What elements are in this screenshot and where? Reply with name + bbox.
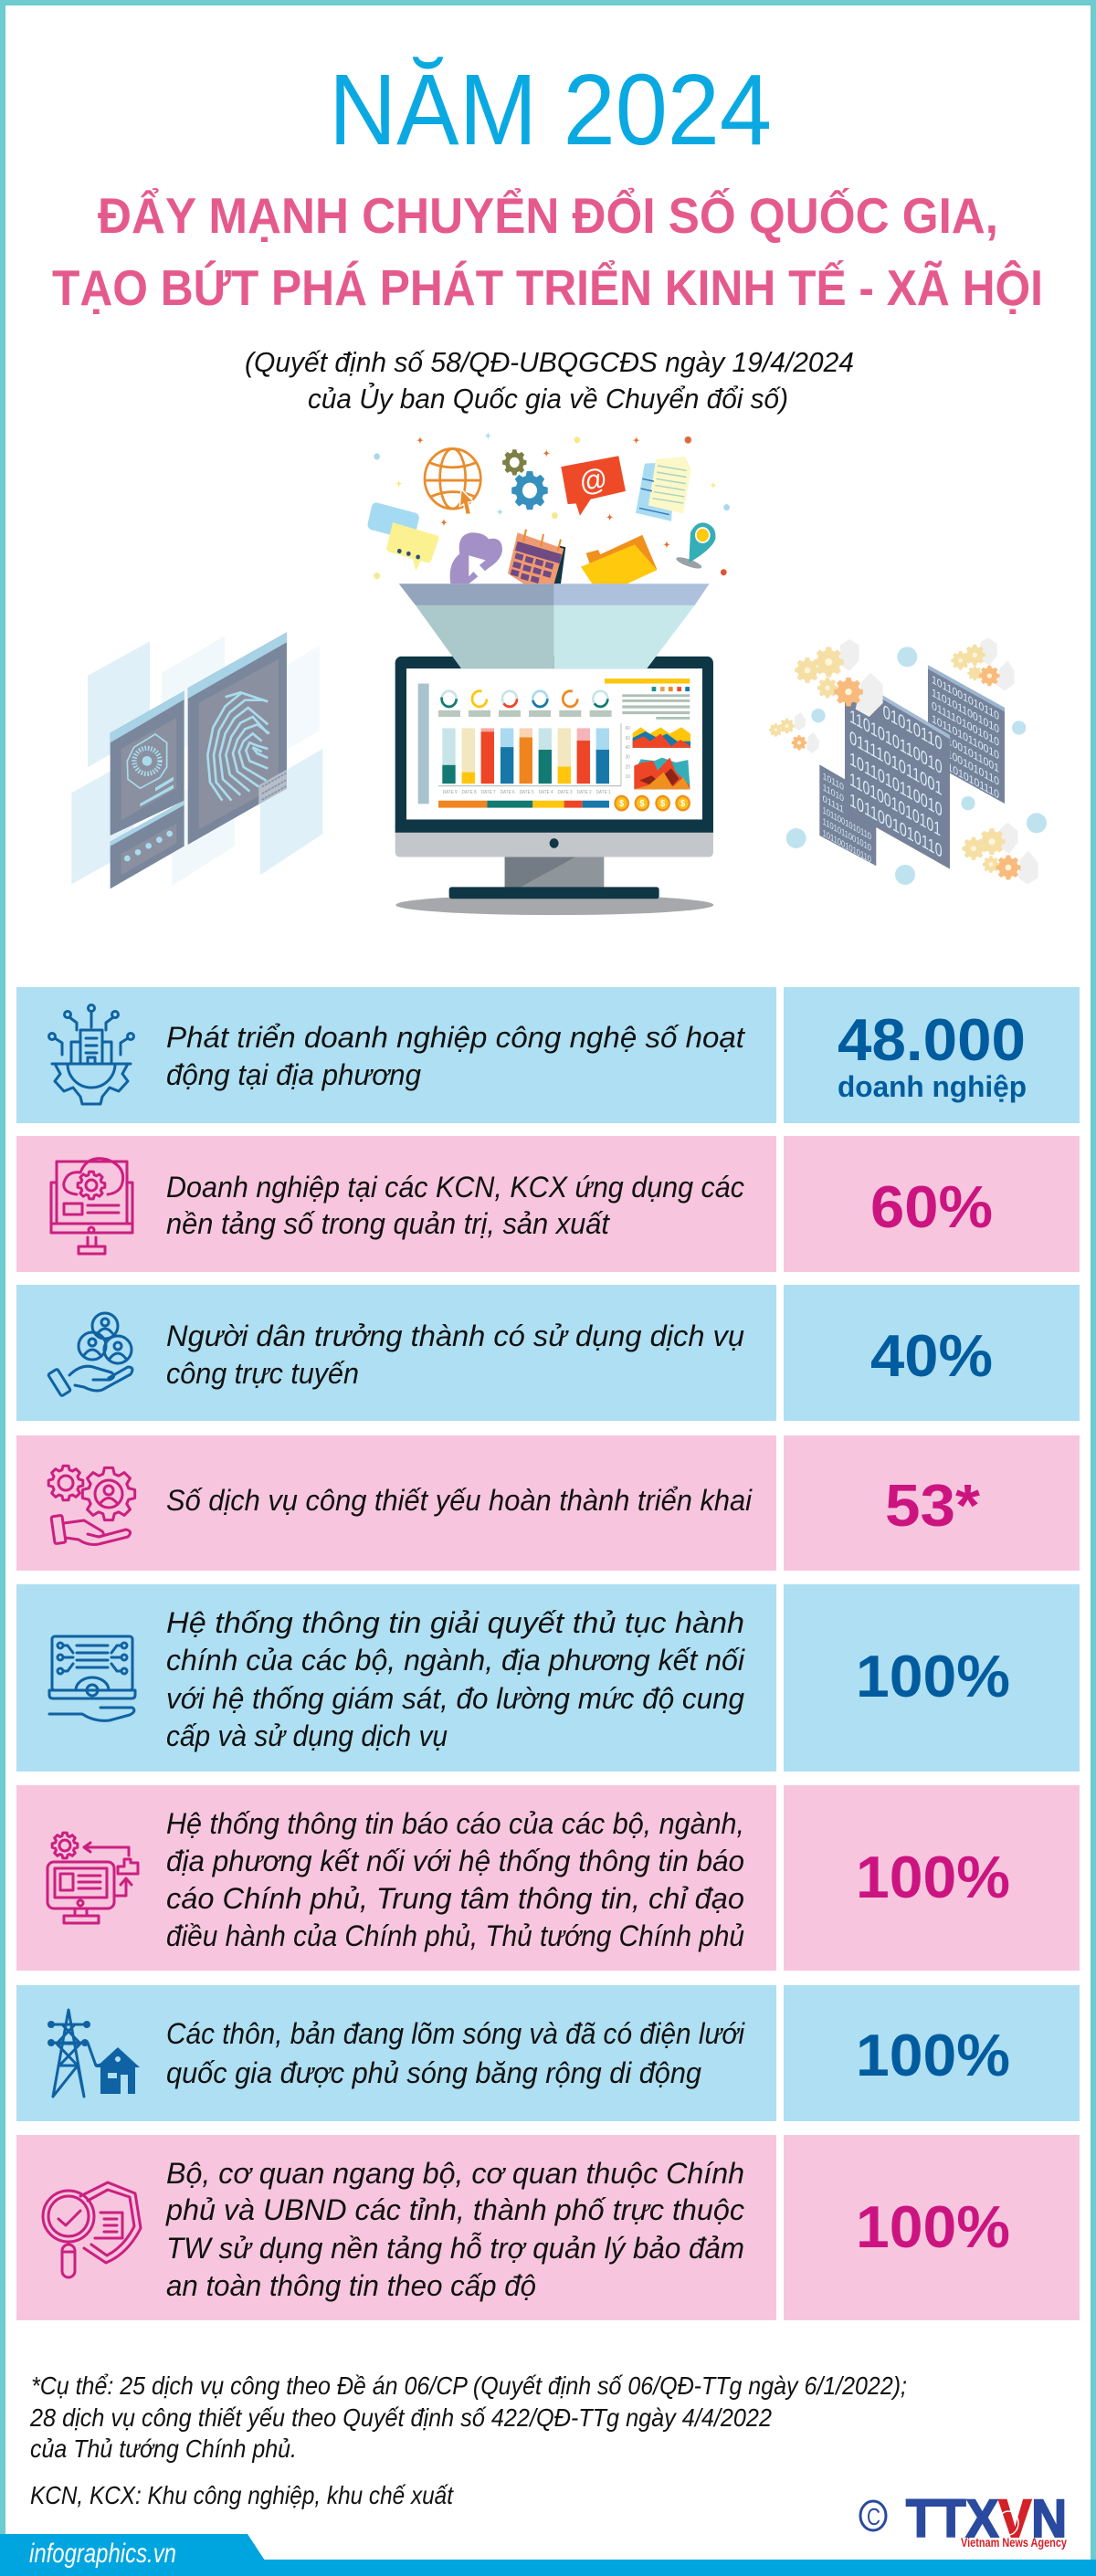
binary text: lower-left panel: 1011001010110 — [823, 805, 871, 843]
binary text: lower-left panel: 1011001010110 — [823, 828, 871, 866]
row text: điều hành của Chính phủ, Thủ tướng Chính phủ — [166, 1919, 744, 1952]
row text: công trực tuyến — [166, 1357, 359, 1390]
footnotes — [29, 2371, 907, 2509]
icon: power tower and house — [47, 2010, 140, 2097]
icon: laptop with circuit on hand — [49, 1636, 135, 1720]
value — [838, 1006, 1027, 1103]
binary text: top-right panel: 1011001010110 — [932, 672, 999, 723]
icon: map pin — [675, 522, 715, 571]
icon: gears and hand — [48, 1466, 135, 1544]
value: 60% — [870, 1173, 993, 1240]
footer bar: infographics.vn — [29, 2539, 176, 2569]
illustration: binary data panels — [769, 637, 1047, 885]
sparkles — [374, 431, 730, 579]
dashboard area charts: 60 — [626, 726, 630, 731]
icon: hand holding people — [47, 1313, 132, 1396]
binary text: top-right panel: 1101011001010 — [932, 685, 999, 736]
binary text: top-right panel — [932, 672, 999, 802]
row text: Bộ, cơ quan ngang bộ, cơ quan thuộc Chính — [166, 2157, 744, 2190]
value: 100% — [856, 1643, 1010, 1709]
dashboard bar chart: DATE 6 — [501, 790, 515, 795]
icon: smart city on gear — [49, 1004, 133, 1104]
dashboard stacked bar — [438, 801, 609, 808]
panel: row 4 public services — [16, 1435, 1080, 1571]
row text: quốc gia được phủ sóng băng rộng di động — [166, 2056, 701, 2089]
binary text: main panel — [849, 699, 943, 862]
row text: Hệ thống thông tin báo cáo của các bộ, ngành, — [166, 1807, 744, 1840]
binary text: main panel: 1011010110010 — [849, 747, 943, 821]
row text: với hệ thống giám sát, đo lường mức độ cung — [166, 1682, 744, 1715]
icon: gears — [502, 449, 548, 510]
row text — [166, 1807, 744, 1952]
footnotes: KCN, KCX: Khu công nghiệp, khu chế xuất — [30, 2481, 454, 2509]
gears cluster 2 — [951, 637, 1015, 691]
row text: Doanh nghiệp tại các KCN, KCX ứng dụng các — [166, 1171, 744, 1204]
value: 40% — [870, 1322, 993, 1389]
source note — [245, 346, 854, 415]
icon: chat bubbles — [366, 501, 439, 571]
dashboard area charts — [621, 723, 690, 789]
value: doanh nghiệp — [838, 1070, 1027, 1103]
panel: row 6 reporting systems — [16, 1785, 1080, 1971]
dashboard area charts: 40 — [626, 745, 630, 751]
binary text: lower-left panel: 01111 — [823, 794, 844, 815]
row text: TW sử dụng nền tảng hỗ trợ quản lý bảo đảm — [166, 2232, 744, 2265]
binary text: lower-left panel — [823, 771, 871, 866]
dashboard bar chart: DATE 9 — [443, 790, 458, 795]
monitor — [395, 657, 713, 915]
binary text: top-right panel: 1001010101110 — [932, 751, 999, 802]
footnotes: 28 dịch vụ công thiết yếu theo Quyết định số 422/QĐ-TTg ngày 4/4/2022 — [29, 2403, 772, 2432]
panel: row 5 admin procedures — [16, 1584, 1080, 1772]
row text: nền tảng số trong quản trị, sản xuất — [166, 1207, 610, 1240]
icon: monitor reporting — [47, 1833, 138, 1923]
binary text: main panel: 1101001010101 — [849, 767, 941, 841]
dashboard area charts: 30 — [626, 755, 630, 761]
binary text: top-right panel: 1101001011001 — [932, 724, 999, 775]
dashboard bar chart: DATE 8 — [462, 790, 477, 795]
dashboard bar chart: DATE 3 — [558, 790, 573, 795]
row text: an toàn thông tin theo cấp độ — [166, 2269, 536, 2302]
value: 100% — [856, 2022, 1010, 2088]
panel: row 3 citizens online — [16, 1285, 1080, 1421]
logo: TTXVN: Vietnam News Agency — [961, 2535, 1067, 2550]
dashboard legend — [605, 678, 690, 720]
icon: cloud upload — [450, 532, 502, 584]
binary text: main panel: 01010110 — [883, 699, 943, 755]
row text — [166, 1320, 744, 1390]
dashboard bar chart: DATE 7 — [481, 790, 496, 795]
row text: Người dân trưởng thành có sử dụng dịch vụ — [166, 1320, 744, 1352]
row text: Số dịch vụ công thiết yếu hoàn thành triển khai — [166, 1484, 753, 1517]
row text — [166, 1021, 745, 1091]
dashboard coins: $ — [660, 799, 666, 809]
panel: row 2 industrial zones — [16, 1136, 1080, 1272]
gears cluster 1 — [795, 639, 883, 717]
dashboard sidebar — [418, 684, 429, 804]
panel: row 8 information security — [16, 2135, 1080, 2320]
dashboard donuts — [442, 691, 607, 707]
binary text: top-right panel: 1011010110010 — [932, 711, 999, 762]
panel: row 1 digital tech enterprises — [16, 987, 1080, 1123]
binary text: top-right panel: 1011001010110 — [932, 738, 999, 788]
row text: chính của các bộ, ngành, địa phương kết nối — [166, 1644, 745, 1677]
dashboard bar chart: DATE 2 — [577, 790, 592, 795]
funnel — [399, 584, 710, 668]
row text: động tại địa phương — [166, 1058, 421, 1091]
row text: Các thôn, bản đang lõm sóng và đã có điện lưới — [166, 2017, 745, 2050]
binary text: top-right panel: 0111101001010 — [932, 699, 999, 749]
logo: TTXVN: C — [867, 2503, 880, 2530]
icon: folder — [581, 535, 657, 584]
dashboard area charts: 50 — [626, 736, 630, 741]
title: NĂM 2024 — [329, 54, 772, 166]
icon: shield magnifier — [43, 2182, 141, 2277]
dashboard coins — [614, 795, 690, 812]
binary text: lower-left panel: 10110 — [823, 771, 844, 794]
row text — [166, 1171, 744, 1240]
dashboard bar chart: DATE 1 — [596, 790, 611, 795]
row text: cấp và sử dụng dịch vụ — [166, 1719, 448, 1752]
footer bar — [0, 2534, 1096, 2576]
icon: documents — [636, 457, 691, 521]
subtitle: ĐẨY MẠNH CHUYỂN ĐỔI SỐ QUỐC GIA, — [98, 187, 998, 244]
icon: email bubble — [561, 456, 626, 516]
dashboard area charts: 10 — [626, 774, 630, 780]
binary text: lower-left panel: 1101011001010 — [823, 816, 871, 854]
illustration: data funnel and monitor — [366, 431, 730, 915]
gears cluster 4 — [962, 823, 1038, 884]
source note: của Ủy ban Quốc gia về Chuyển đổi số) — [308, 382, 788, 415]
icon: email bubble: @ — [577, 462, 609, 499]
value: 100% — [856, 2193, 1010, 2260]
dashboard coins: $ — [680, 799, 686, 809]
row text: cáo Chính phủ, Trung tâm thông tin, chỉ đạo — [166, 1882, 744, 1915]
illustration: biometric security screens — [71, 632, 322, 888]
row text — [166, 2017, 745, 2089]
dashboard coins: $ — [619, 799, 625, 809]
panel: row 7 villages coverage — [16, 1985, 1080, 2121]
value: 48.000 — [838, 1006, 1026, 1073]
row text — [166, 1606, 745, 1752]
dashboard bar chart — [438, 728, 621, 795]
subtitle — [52, 187, 1043, 316]
row text: Phát triển doanh nghiệp công nghệ số hoạt — [166, 1021, 745, 1054]
icon: calendar — [508, 530, 565, 584]
binary text: main panel: 1011001010110 — [849, 788, 943, 862]
row text: Hệ thống thông tin giải quyết thủ tục hành — [166, 1606, 744, 1639]
dashboard coins: $ — [639, 799, 645, 809]
gears cluster 3 — [769, 712, 819, 753]
source note: (Quyết định số 58/QĐ-UBQGCĐS ngày 19/4/2024 — [245, 346, 854, 378]
row text: phủ và UBND các tỉnh, thành phố trực thuộc — [165, 2193, 744, 2226]
binary text: main panel: 0111101011001 — [849, 726, 943, 800]
row text — [165, 2157, 744, 2302]
footnotes: của Thủ tướng Chính phủ. — [30, 2434, 297, 2463]
row text: địa phương kết nối với hệ thống thông tin báo — [166, 1845, 744, 1877]
value: 53* — [885, 1472, 981, 1539]
value: 100% — [856, 1844, 1010, 1910]
binary text: main panel: 1101010110010 — [849, 704, 943, 779]
icon: monitor with cloud gear — [51, 1159, 132, 1254]
footnotes: *Cụ thể: 25 dịch vụ công theo Đề án 06/CP (Quyết định số 06/QĐ-TTg ngày 6/1/2022); — [31, 2371, 907, 2400]
dashboard bar chart: DATE 4 — [539, 790, 553, 795]
binary text: lower-left panel: 11010 — [823, 783, 844, 804]
dashboard area charts: 20 — [626, 764, 630, 770]
dashboard bar chart: DATE 5 — [520, 790, 534, 795]
logo: TTXVN: TTXVN — [906, 2489, 1067, 2549]
icon: globe — [425, 448, 480, 515]
